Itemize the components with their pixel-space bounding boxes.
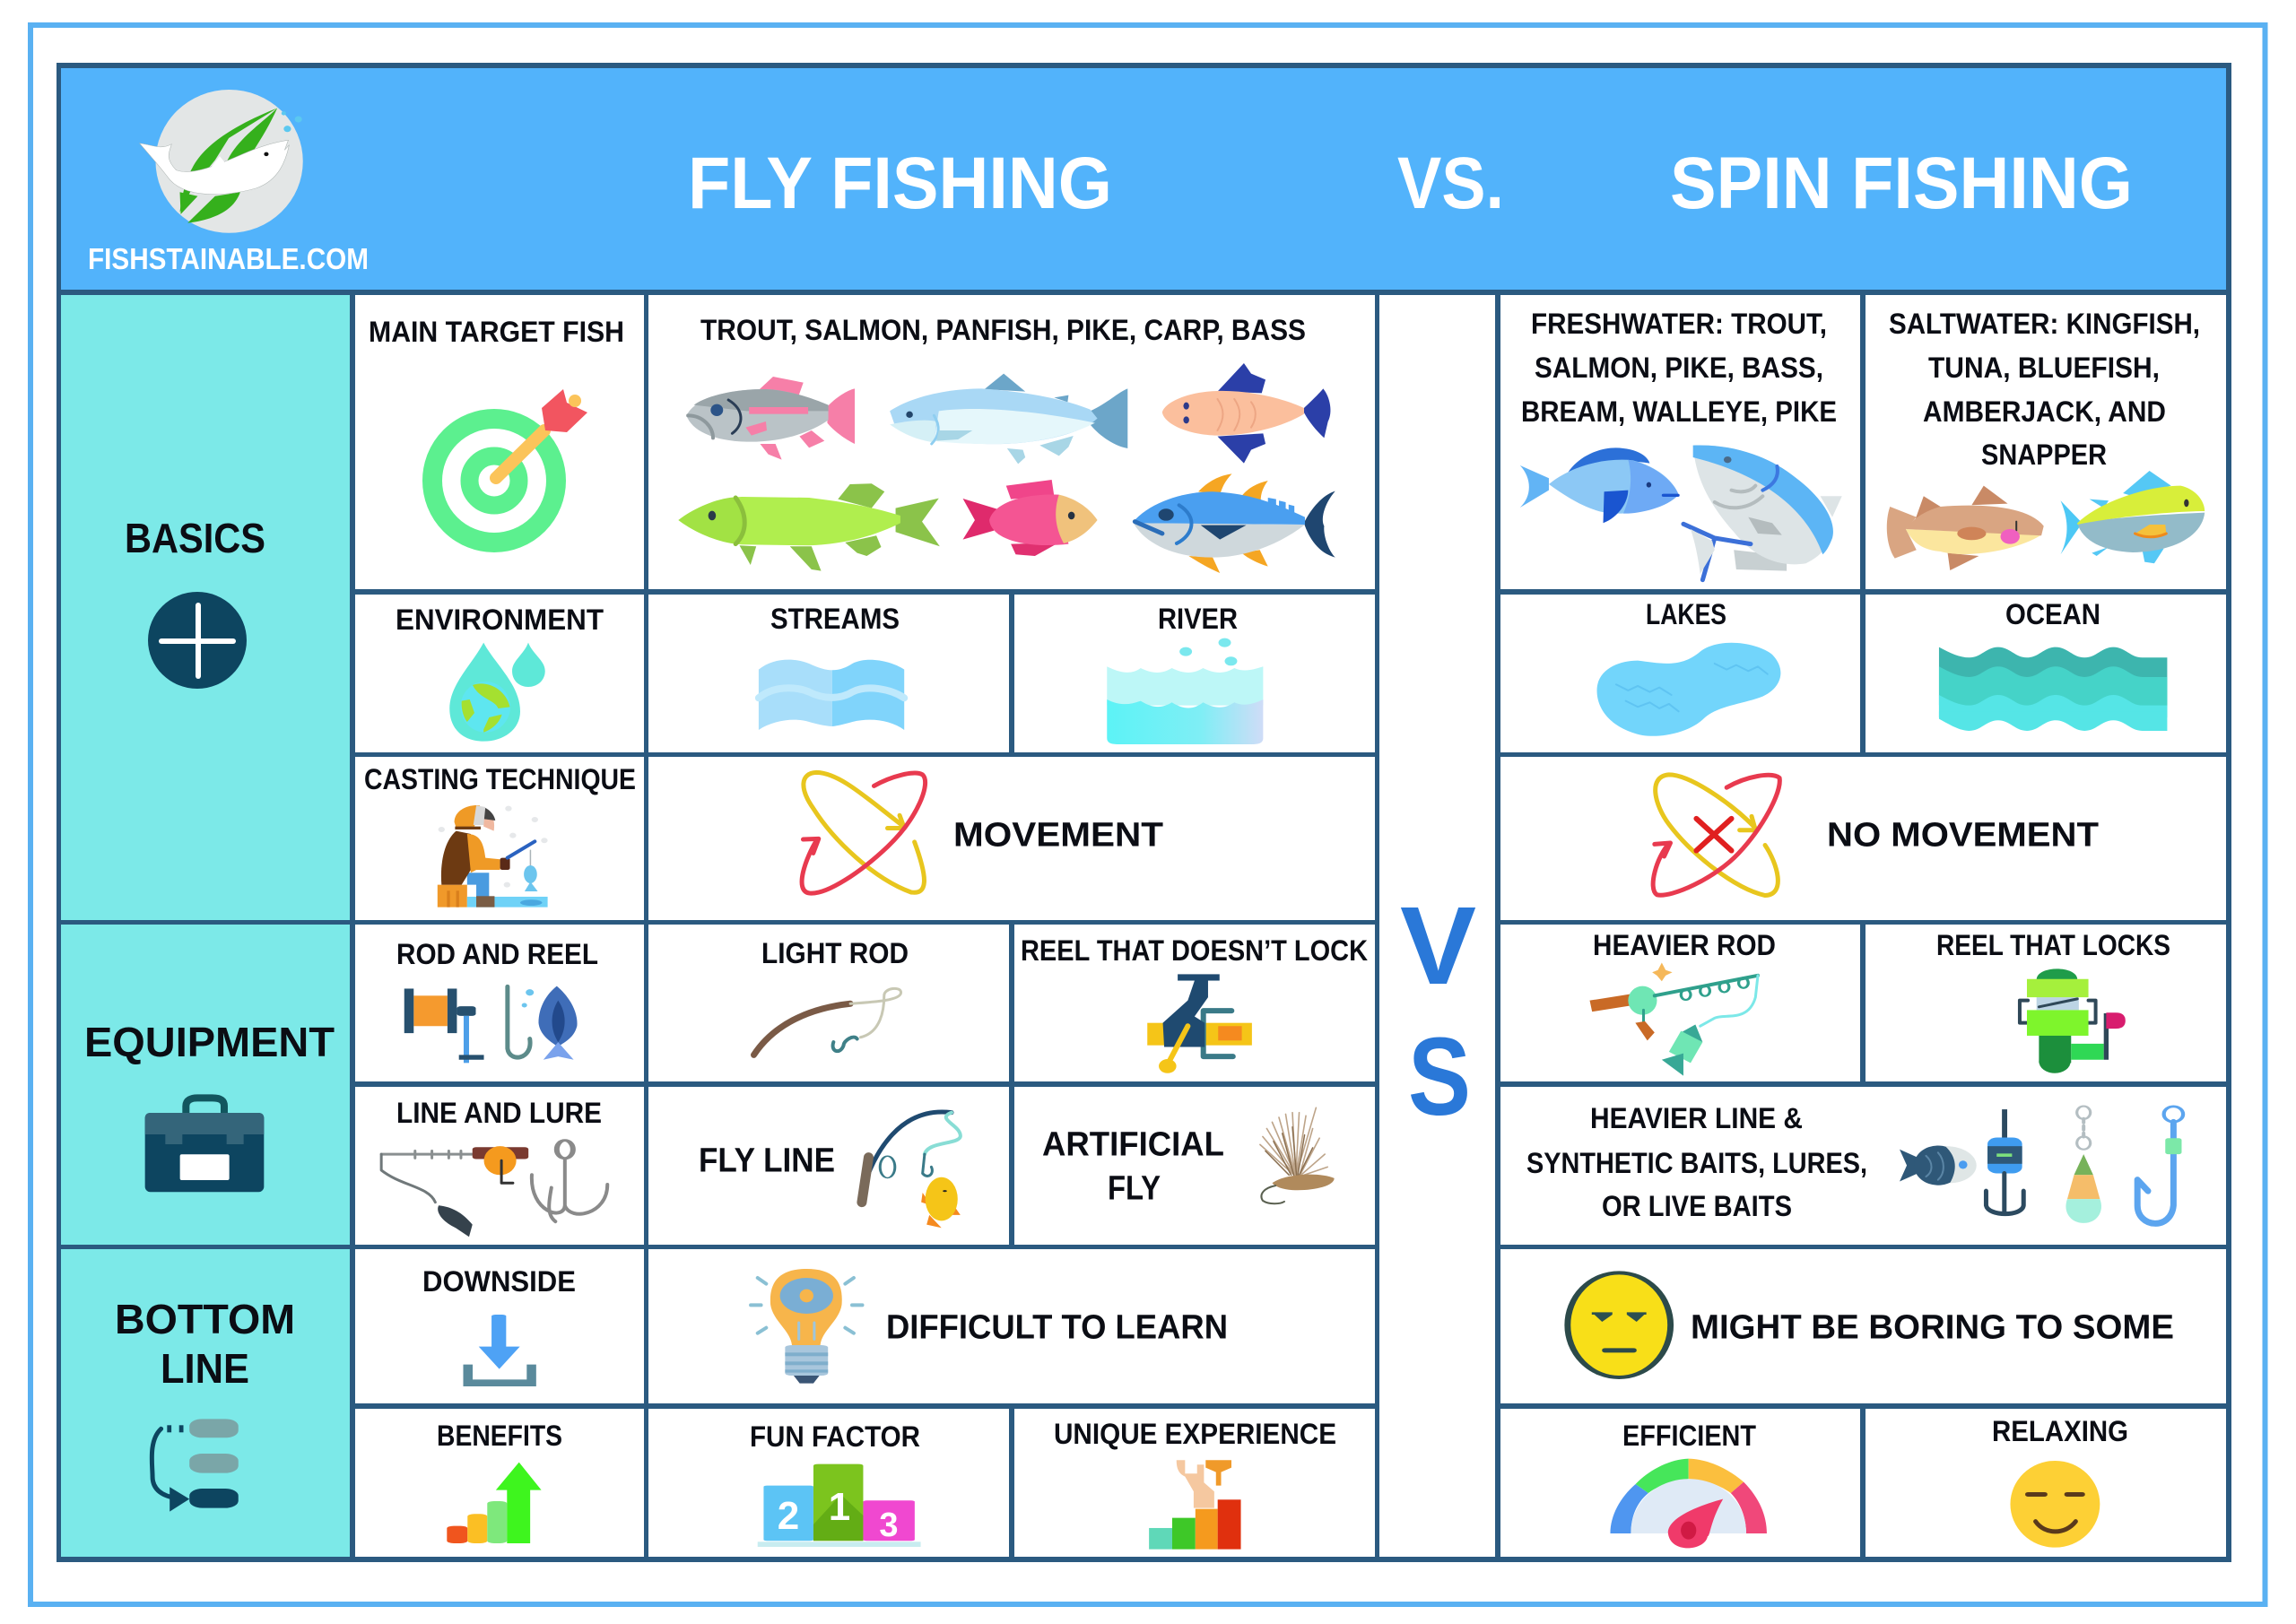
panel: efficient — [1500, 1409, 1860, 1557]
icons: saltwater fish — [1887, 471, 2205, 570]
text: saltwater species — [1889, 308, 2200, 471]
panel: benefits label — [355, 1409, 644, 1557]
icon: spinning reel — [1147, 974, 1252, 1073]
text: no movement: NO MOVEMENT — [1827, 816, 2099, 854]
panel: saltwater target fish — [1866, 295, 2226, 589]
panel: spin no movement — [1500, 757, 2226, 920]
vs letter s: S — [1408, 1016, 1471, 1139]
logo wordmark: FISHSTAINABLE.COM — [88, 242, 369, 275]
label: REEL THAT LOCKS — [1936, 929, 2170, 961]
heading: bottom line: LINE — [161, 1345, 249, 1392]
title: spin fishing: SPIN FISHING — [1670, 143, 2133, 224]
panel: reel that does not lock — [1014, 925, 1375, 1081]
icon: download arrow — [463, 1315, 536, 1386]
label: UNIQUE EXPERIENCE — [1054, 1418, 1336, 1450]
icon: blue hook — [2137, 1107, 2183, 1223]
label: HEAVIER ROD — [1593, 929, 1776, 961]
text: heavier line and baits: OR LIVE BAITS — [1602, 1190, 1792, 1222]
panel: downside label — [355, 1249, 644, 1403]
icon: growth arrow bars — [447, 1463, 542, 1543]
heading: basics: BASICS — [125, 515, 265, 561]
title: vs.: VS. — [1397, 143, 1504, 224]
panel: artificial fly — [1014, 1087, 1375, 1245]
icon: ordered list with arrow — [152, 1419, 239, 1512]
panel: equipment category — [61, 925, 350, 1245]
panel: might be boring — [1500, 1249, 2226, 1403]
label: REEL THAT DOESN’T LOCK — [1021, 934, 1368, 967]
panel: heavier line and baits — [1500, 1087, 2226, 1245]
label: LAKES — [1646, 598, 1726, 630]
heading: bottom line: BOTTOM — [115, 1296, 295, 1342]
icon: light rod — [754, 988, 901, 1055]
text: fly line: FLY LINE — [699, 1142, 835, 1180]
label: EFFICIENT — [1622, 1420, 1756, 1452]
icon: fish bait — [1900, 1145, 1977, 1185]
panel: line and lure label — [355, 1087, 644, 1245]
icon: looping arrows with cross — [1653, 775, 1779, 896]
panel: lakes — [1500, 595, 1860, 752]
header banner — [61, 68, 2226, 290]
text: freshwater species — [1521, 308, 1837, 428]
text: freshwater species: FRESHWATER: TROUT, — [1531, 308, 1827, 340]
label: LIGHT ROD — [761, 937, 909, 969]
text: fly target species: TROUT, SALMON, PANFISH, PIKE, CARP, BASS — [700, 314, 1306, 346]
icon: line lure and treble hook — [381, 1141, 607, 1237]
panel: fly fishing target fish — [648, 295, 1375, 589]
icons: freshwater fish — [1520, 445, 1842, 580]
panel: heavier rod — [1500, 925, 1860, 1081]
icon: podium — [758, 1464, 921, 1547]
text: artificial fly — [1042, 1126, 1224, 1207]
label: LINE AND LURE — [396, 1097, 602, 1129]
text: saltwater species: AMBERJACK, AND — [1923, 395, 2166, 428]
icon: stream waves — [759, 660, 904, 730]
text: saltwater species: TUNA, BLUEFISH, — [1928, 352, 2160, 384]
panel: difficult to learn — [648, 1249, 1375, 1403]
panel: environment label — [355, 595, 644, 752]
label: MAIN TARGET FISH — [369, 316, 624, 348]
icon: seated angler — [438, 805, 548, 908]
panel: ocean — [1866, 595, 2226, 752]
text: freshwater species: SALMON, PIKE, BASS, — [1535, 352, 1823, 384]
text: movement: MOVEMENT — [953, 816, 1163, 854]
icon: looping arrows — [802, 772, 926, 893]
icon: lake — [1597, 643, 1780, 736]
panel: reel that locks — [1866, 925, 2226, 1081]
text: saltwater species: SALTWATER: KINGFISH, — [1889, 308, 2200, 340]
panel: rod and reel label — [355, 925, 644, 1081]
icon: spoon lure — [2066, 1107, 2101, 1223]
heading: equipment: EQUIPMENT — [84, 1019, 335, 1065]
text: difficult to learn: DIFFICULT TO LEARN — [886, 1309, 1228, 1347]
label: DOWNSIDE — [422, 1265, 576, 1298]
label: BENEFITS — [437, 1420, 562, 1452]
icon: reel hook and fish — [404, 986, 578, 1063]
icon: bobber with treble hook — [1986, 1109, 2023, 1214]
label: RELAXING — [1992, 1415, 2128, 1447]
icon: podium: 1 — [829, 1485, 850, 1529]
logo: fishstainable — [140, 90, 303, 233]
text: heavier line and baits: SYNTHETIC BAITS, LURES, — [1526, 1147, 1867, 1179]
text: heavier line and baits: HEAVIER LINE & — [1590, 1102, 1803, 1134]
icon: podium: 2 — [778, 1494, 799, 1538]
icon: river water — [1107, 638, 1263, 744]
icon: briefcase — [145, 1098, 264, 1192]
panel: fun factor — [648, 1409, 1009, 1557]
label: CASTING TECHNIQUE — [364, 763, 636, 795]
panel: streams — [648, 595, 1009, 752]
icon: earth water drops — [449, 643, 545, 742]
text: might be boring: MIGHT BE BORING TO SOME — [1691, 1309, 2174, 1347]
text: freshwater species: BREAM, WALLEYE, PIKE — [1521, 395, 1837, 428]
panel: bottom line category — [61, 1249, 350, 1557]
label: ENVIRONMENT — [396, 604, 604, 636]
icon: speed gauge — [1610, 1459, 1767, 1548]
text: artificial fly: ARTIFICIAL — [1042, 1126, 1224, 1164]
icon: ocean waves — [1939, 647, 2167, 731]
icon: plus circle — [148, 592, 247, 689]
panel: main target fish label — [355, 295, 644, 589]
text: heavier line and baits — [1526, 1102, 1867, 1222]
icon: locked reel — [2020, 968, 2126, 1073]
icon: podium: 3 — [879, 1507, 899, 1544]
icon: fly rod with line and fish — [862, 1112, 961, 1228]
heading: bottom line — [115, 1296, 295, 1392]
title: fly fishing: FLY FISHING — [688, 143, 1112, 224]
panel: relaxing — [1866, 1409, 2226, 1557]
label: OCEAN — [2005, 598, 2100, 630]
panel: freshwater target fish — [1500, 295, 1860, 589]
panel: fly line — [648, 1087, 1009, 1245]
icon: target with arrow — [432, 389, 587, 543]
icon: person on podium with trophy — [1149, 1460, 1241, 1550]
panel: basics category — [61, 295, 350, 920]
label: ROD AND REEL — [396, 938, 598, 970]
panel: river — [1014, 595, 1375, 752]
label: RIVER — [1158, 603, 1238, 635]
panel: unique experience — [1014, 1409, 1375, 1557]
text: saltwater species: SNAPPER — [1981, 439, 2107, 471]
label: FUN FACTOR — [750, 1420, 920, 1453]
panel: casting technique label — [355, 757, 644, 920]
icon: relaxed face — [2010, 1461, 2100, 1548]
panel: light rod — [648, 925, 1009, 1081]
icon: feather fly — [1260, 1107, 1335, 1203]
icon: heavier rod with lure — [1589, 963, 1758, 1076]
icon: light bulb with gear — [751, 1269, 862, 1384]
label: STREAMS — [770, 603, 900, 635]
text: artificial fly: FLY — [1108, 1169, 1161, 1207]
vs letter v: V — [1400, 885, 1476, 1008]
icon: bored face — [1568, 1272, 1671, 1377]
panel: vs column — [1379, 295, 1495, 1557]
icons: six fish — [678, 363, 1335, 573]
panel: fly movement — [648, 757, 1375, 920]
